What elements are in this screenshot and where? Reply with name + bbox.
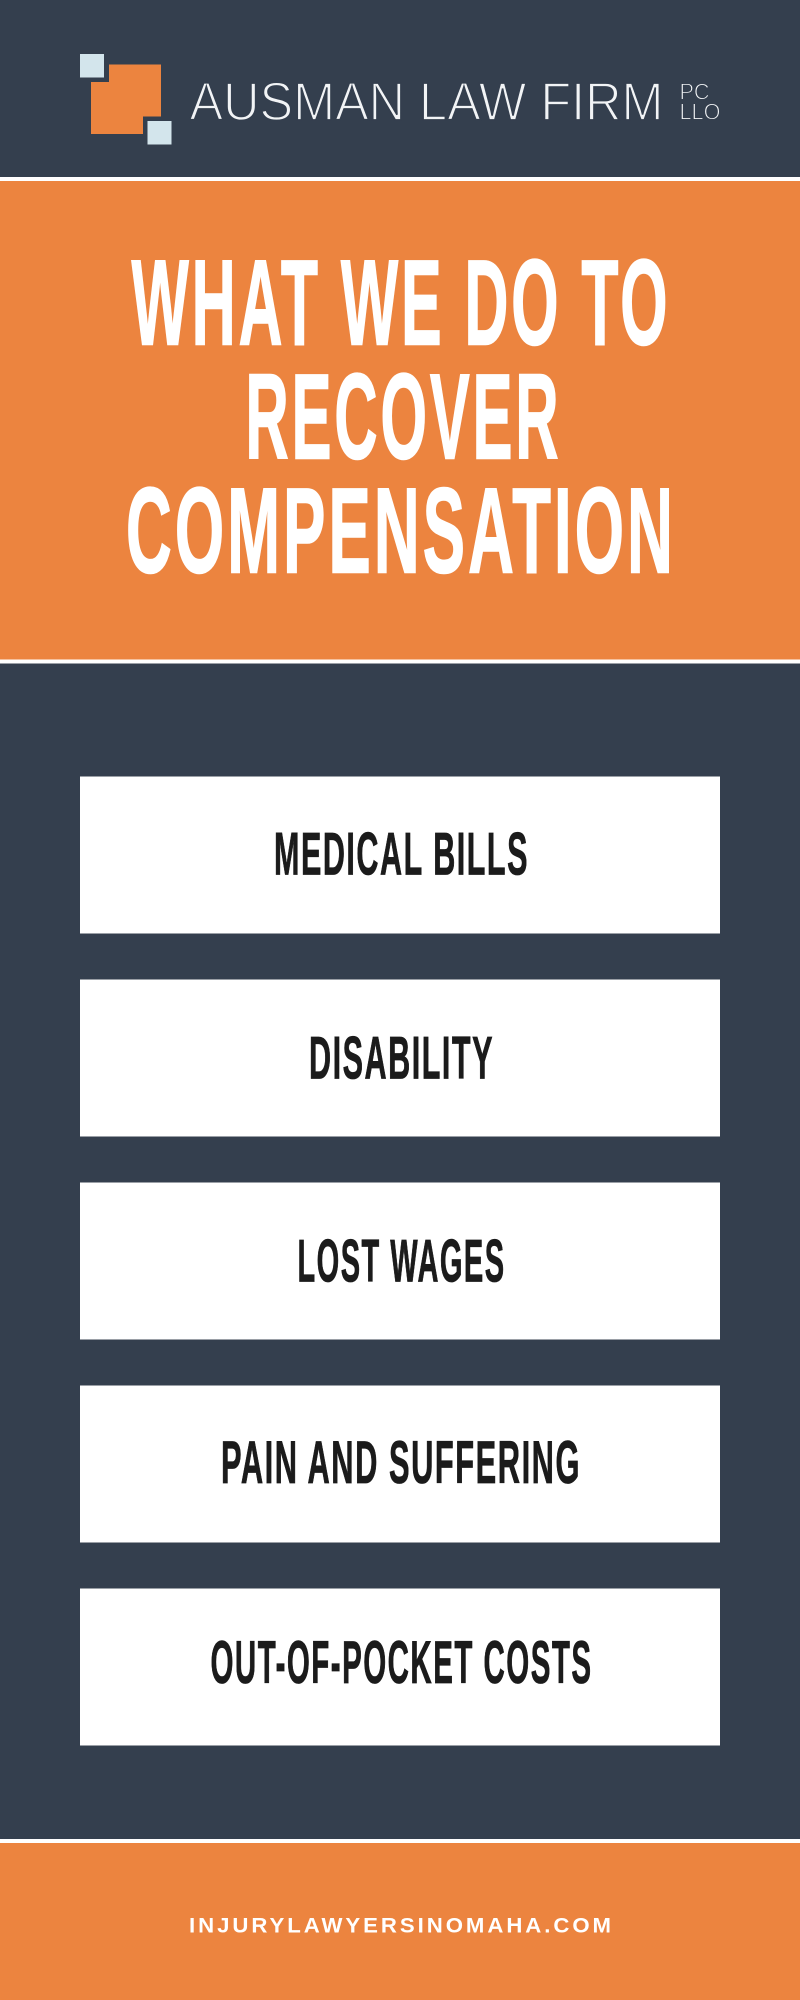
logo wordmark: PC [680, 78, 710, 104]
footer band [0, 1839, 800, 2000]
card: disability [80, 980, 720, 1136]
card: medical bills [80, 776, 720, 934]
title heading [126, 234, 676, 598]
card: medical bills: MEDICAL BILLS [274, 820, 529, 888]
icon: law firm logo mark [80, 54, 172, 144]
card: disability: DISABILITY [309, 1024, 494, 1092]
card: pain and suffering [80, 1386, 720, 1542]
footer website address: INJURYLAWYERSINOMAHA.COM [189, 1914, 614, 1938]
card: out-of-pocket costs [80, 1588, 720, 1746]
title panel [0, 177, 800, 664]
logo wordmark: LLO [680, 98, 720, 124]
card: lost wages: LOST WAGES [298, 1227, 506, 1295]
logo wordmark: AUSMAN LAW FIRM [190, 72, 664, 132]
header band with logo [80, 54, 720, 144]
card: lost wages [80, 1182, 720, 1340]
